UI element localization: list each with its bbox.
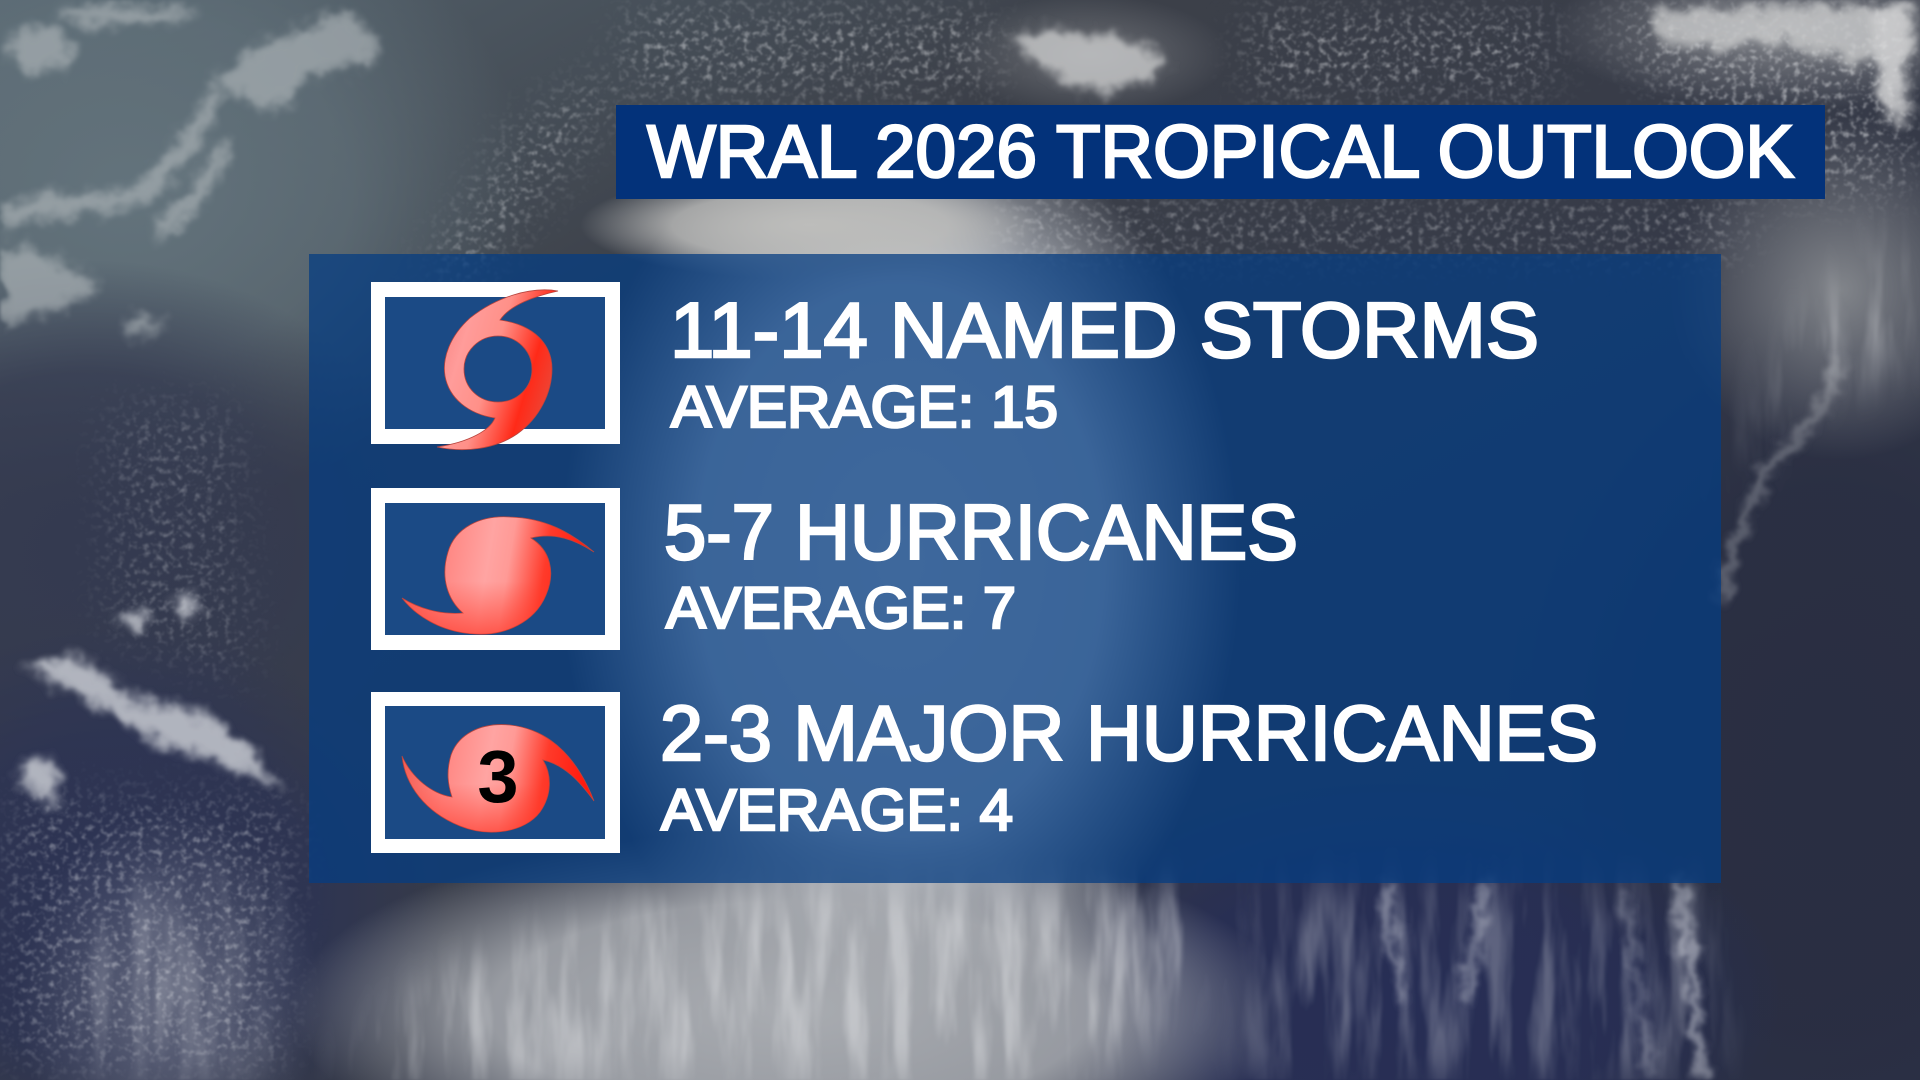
heading: major hurricanes: 2-3 MAJOR HURRICANES xyxy=(660,689,1598,777)
text: major hurricanes average: AVERAGE: 4 xyxy=(661,778,1013,843)
label: category 3: 3 xyxy=(477,735,519,818)
title: WRAL 2026 TROPICAL OUTLOOK xyxy=(647,110,1794,193)
heading: named storms: 11-14 NAMED STORMS xyxy=(670,286,1539,374)
cloud tops north xyxy=(1010,5,1915,130)
heading: hurricanes: 5-7 HURRICANES xyxy=(664,488,1298,576)
icon: hurricane symbol xyxy=(371,488,620,650)
cloud bands top left xyxy=(0,4,378,333)
panel: outlook statistics xyxy=(309,254,1721,883)
icon: major hurricane symbol xyxy=(371,692,620,853)
cloud line east of panel xyxy=(1721,360,1838,600)
text: hurricanes average: AVERAGE: 7 xyxy=(666,576,1016,641)
bright cloud chain lower left xyxy=(20,598,285,801)
icon: tropical storm symbol xyxy=(371,282,620,450)
text: named storms average: AVERAGE: 15 xyxy=(671,375,1058,440)
thin cloud lines lower right xyxy=(1385,885,1702,1075)
